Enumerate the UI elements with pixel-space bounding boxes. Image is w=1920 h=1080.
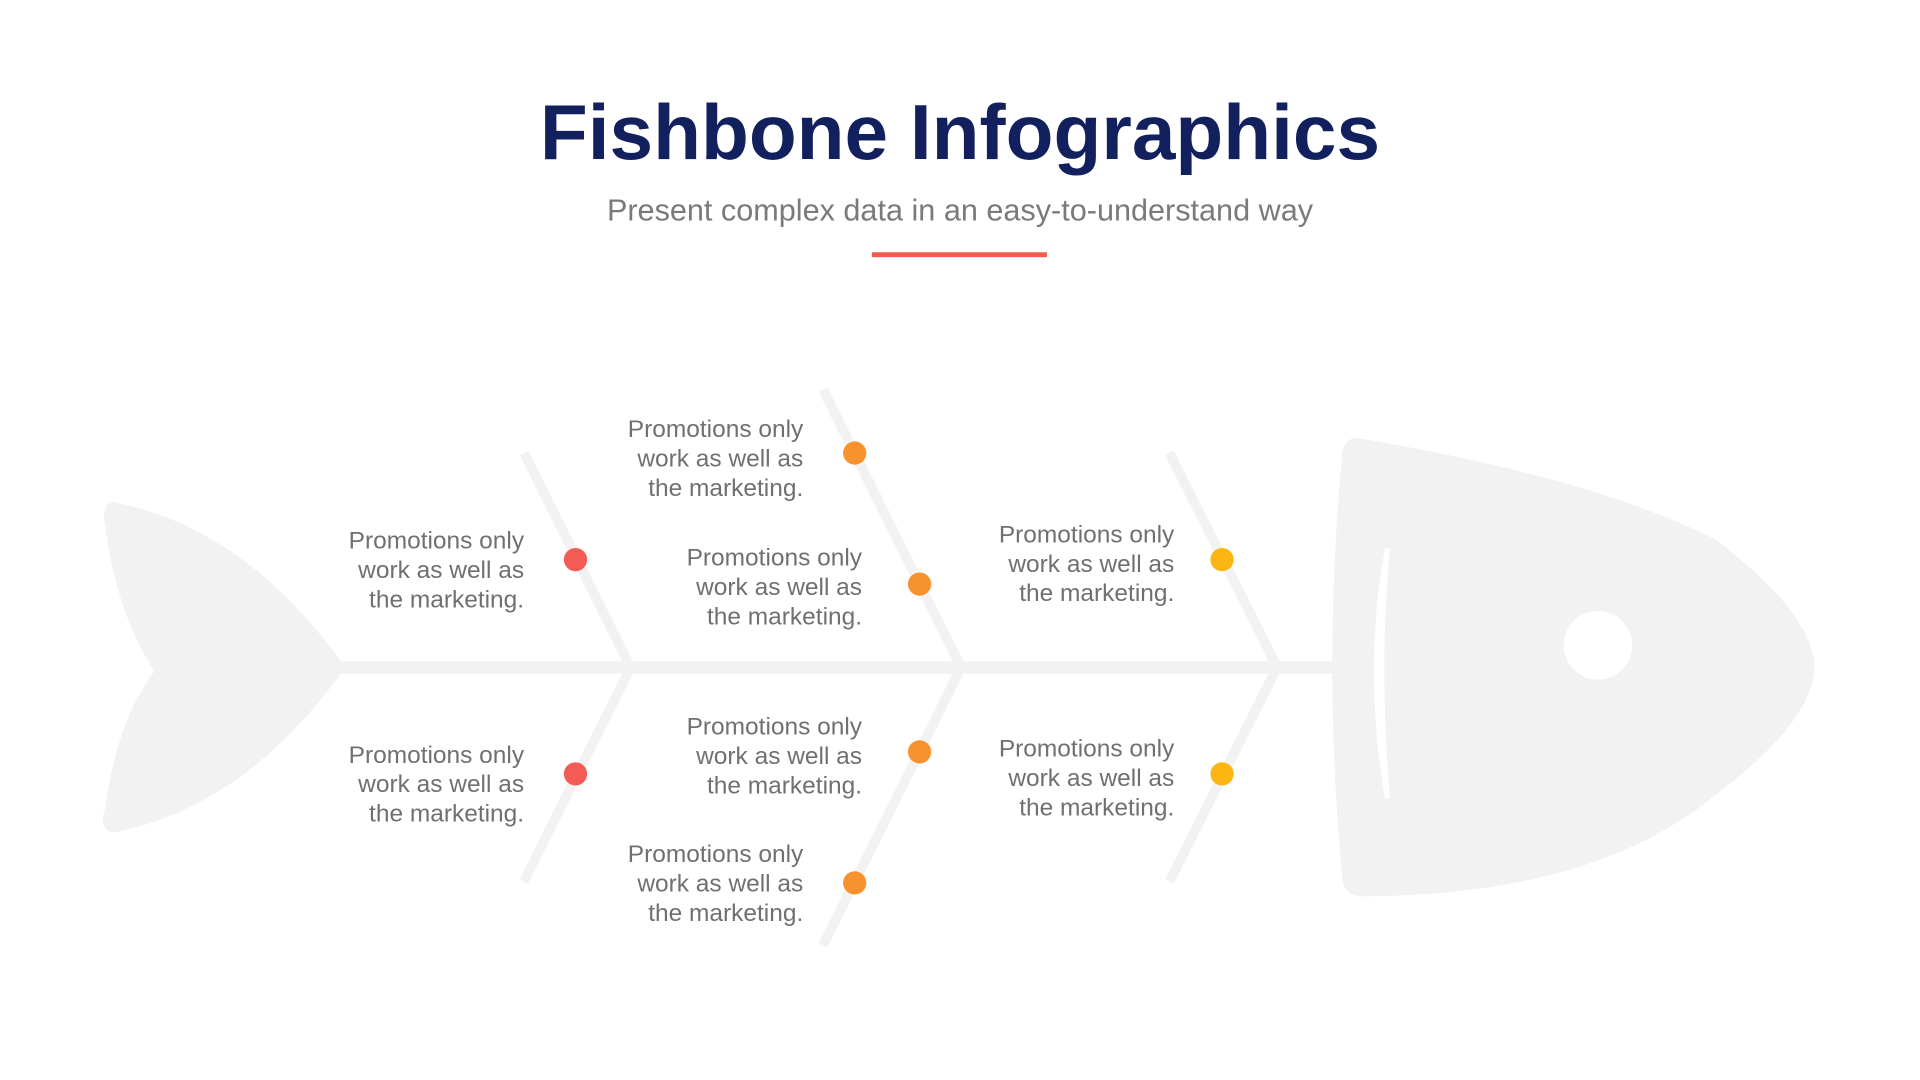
text: orange upper inner: Promotions only bbox=[687, 545, 863, 572]
title: Fishbone Infographics bbox=[540, 88, 1380, 176]
text: orange bottom: Promotions only bbox=[628, 841, 804, 868]
text: orange lower inner: Promotions only bbox=[687, 714, 863, 741]
text: yellow bottom: Promotions only bbox=[999, 736, 1175, 763]
text: orange top: the marketing. bbox=[648, 475, 803, 502]
text: red bottom: Promotions only bbox=[349, 742, 525, 769]
text: orange bottom: the marketing. bbox=[648, 900, 803, 927]
text: orange upper inner: work as well as bbox=[695, 574, 862, 601]
text: orange top: work as well as bbox=[636, 446, 803, 473]
text: red top: Promotions only bbox=[349, 528, 525, 555]
eye bbox=[1564, 611, 1632, 680]
text: orange bottom: work as well as bbox=[636, 870, 803, 897]
bones bbox=[524, 389, 1277, 945]
text: red bottom: work as well as bbox=[357, 771, 524, 798]
text: yellow top: work as well as bbox=[1007, 551, 1174, 578]
text: yellow top: the marketing. bbox=[1019, 580, 1174, 607]
text: red top: the marketing. bbox=[369, 586, 524, 613]
accent underline bbox=[872, 252, 1047, 257]
dots bbox=[564, 441, 1234, 894]
text: orange lower inner: the marketing. bbox=[707, 772, 862, 799]
spine bbox=[337, 661, 1341, 673]
gill bbox=[1376, 549, 1387, 798]
text: red top: work as well as bbox=[357, 557, 524, 584]
text: yellow top: Promotions only bbox=[999, 521, 1175, 548]
text blocks bbox=[349, 416, 1175, 927]
text: yellow bottom: the marketing. bbox=[1019, 795, 1174, 822]
text: orange top: Promotions only bbox=[628, 416, 804, 443]
fish head bbox=[1332, 438, 1815, 896]
fish tail bbox=[103, 502, 345, 833]
text: yellow bottom: work as well as bbox=[1007, 765, 1174, 792]
text: red bottom: the marketing. bbox=[369, 801, 524, 828]
text: orange lower inner: work as well as bbox=[695, 743, 862, 770]
fish skeleton bbox=[103, 389, 1815, 945]
subtitle: Present complex data in an easy-to-understand way bbox=[607, 193, 1314, 227]
text: orange upper inner: the marketing. bbox=[707, 603, 862, 630]
